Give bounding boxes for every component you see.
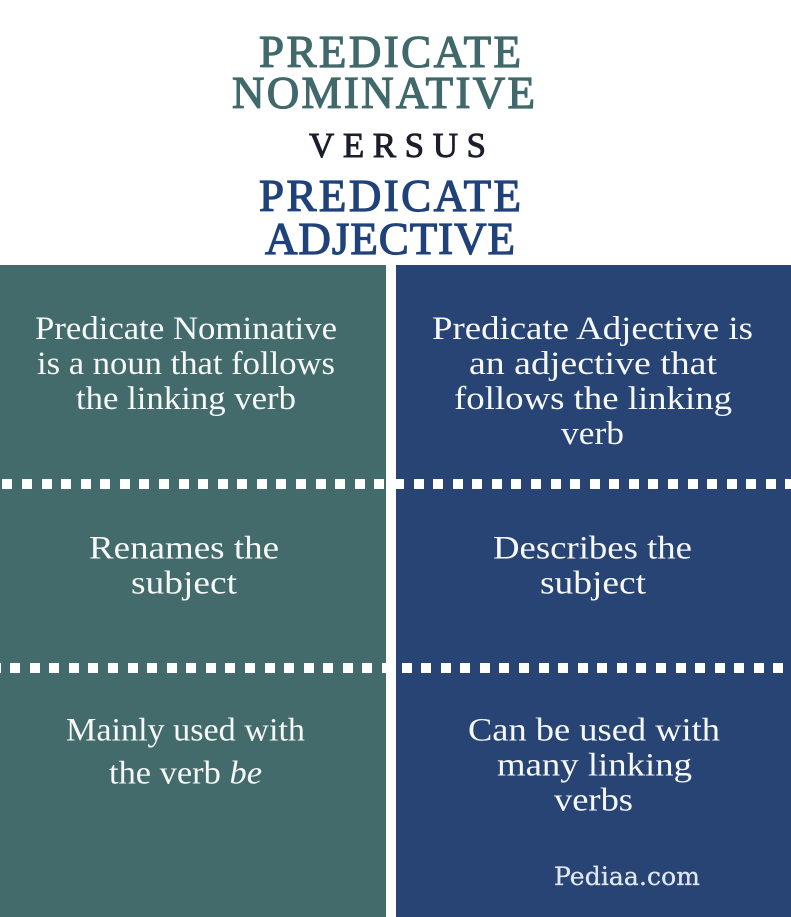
column gutter [386,265,396,917]
divider: first row [2,479,791,489]
text: adjective definition: Predicate Adjective is [432,311,753,347]
text: adjective function [493,530,692,602]
text: nominative definition [35,311,337,417]
logo: Pediaa.com: Pediaa.com [554,862,700,891]
text: nominative definition: the linking verb [76,381,296,417]
text: nominative definition: Predicate Nominative [35,311,337,347]
panel: predicate nominative [0,265,386,917]
heading: versus: VERSUS [309,126,486,165]
text: adjective function: Describes the [493,530,692,566]
text: adjective definition: verb [561,416,624,452]
text: adjective definition: an adjective that [469,346,717,382]
text: nominative usage [66,712,306,792]
text: adjective definition [432,311,753,452]
heading: predicate adjective [259,171,521,264]
text: adjective usage: verbs [554,782,633,818]
text: nominative usage: the verb be [109,756,262,792]
divider: second row [0,663,783,673]
title block [232,27,535,264]
heading: predicate nominative [232,27,535,118]
text: adjective definition: follows the linking [454,381,732,417]
text: nominative definition: is a noun that follows [37,346,335,382]
text: adjective usage: many linking [497,748,692,784]
heading: predicate adjective: ADJECTIVE [265,214,515,264]
text: nominative usage: Mainly used with [66,712,306,748]
text: adjective usage [468,712,721,818]
text: nominative function: Renames the [89,530,279,566]
text: adjective function: subject [540,566,646,602]
text: nominative function [89,530,279,602]
text: adjective usage: Can be used with [468,712,721,748]
text: nominative function: subject [131,566,237,602]
heading: predicate nominative: PREDICATE [259,27,521,77]
heading: predicate adjective: PREDICATE [259,171,521,221]
panel: predicate adjective [396,265,791,917]
heading: predicate nominative: NOMINATIVE [232,68,535,118]
